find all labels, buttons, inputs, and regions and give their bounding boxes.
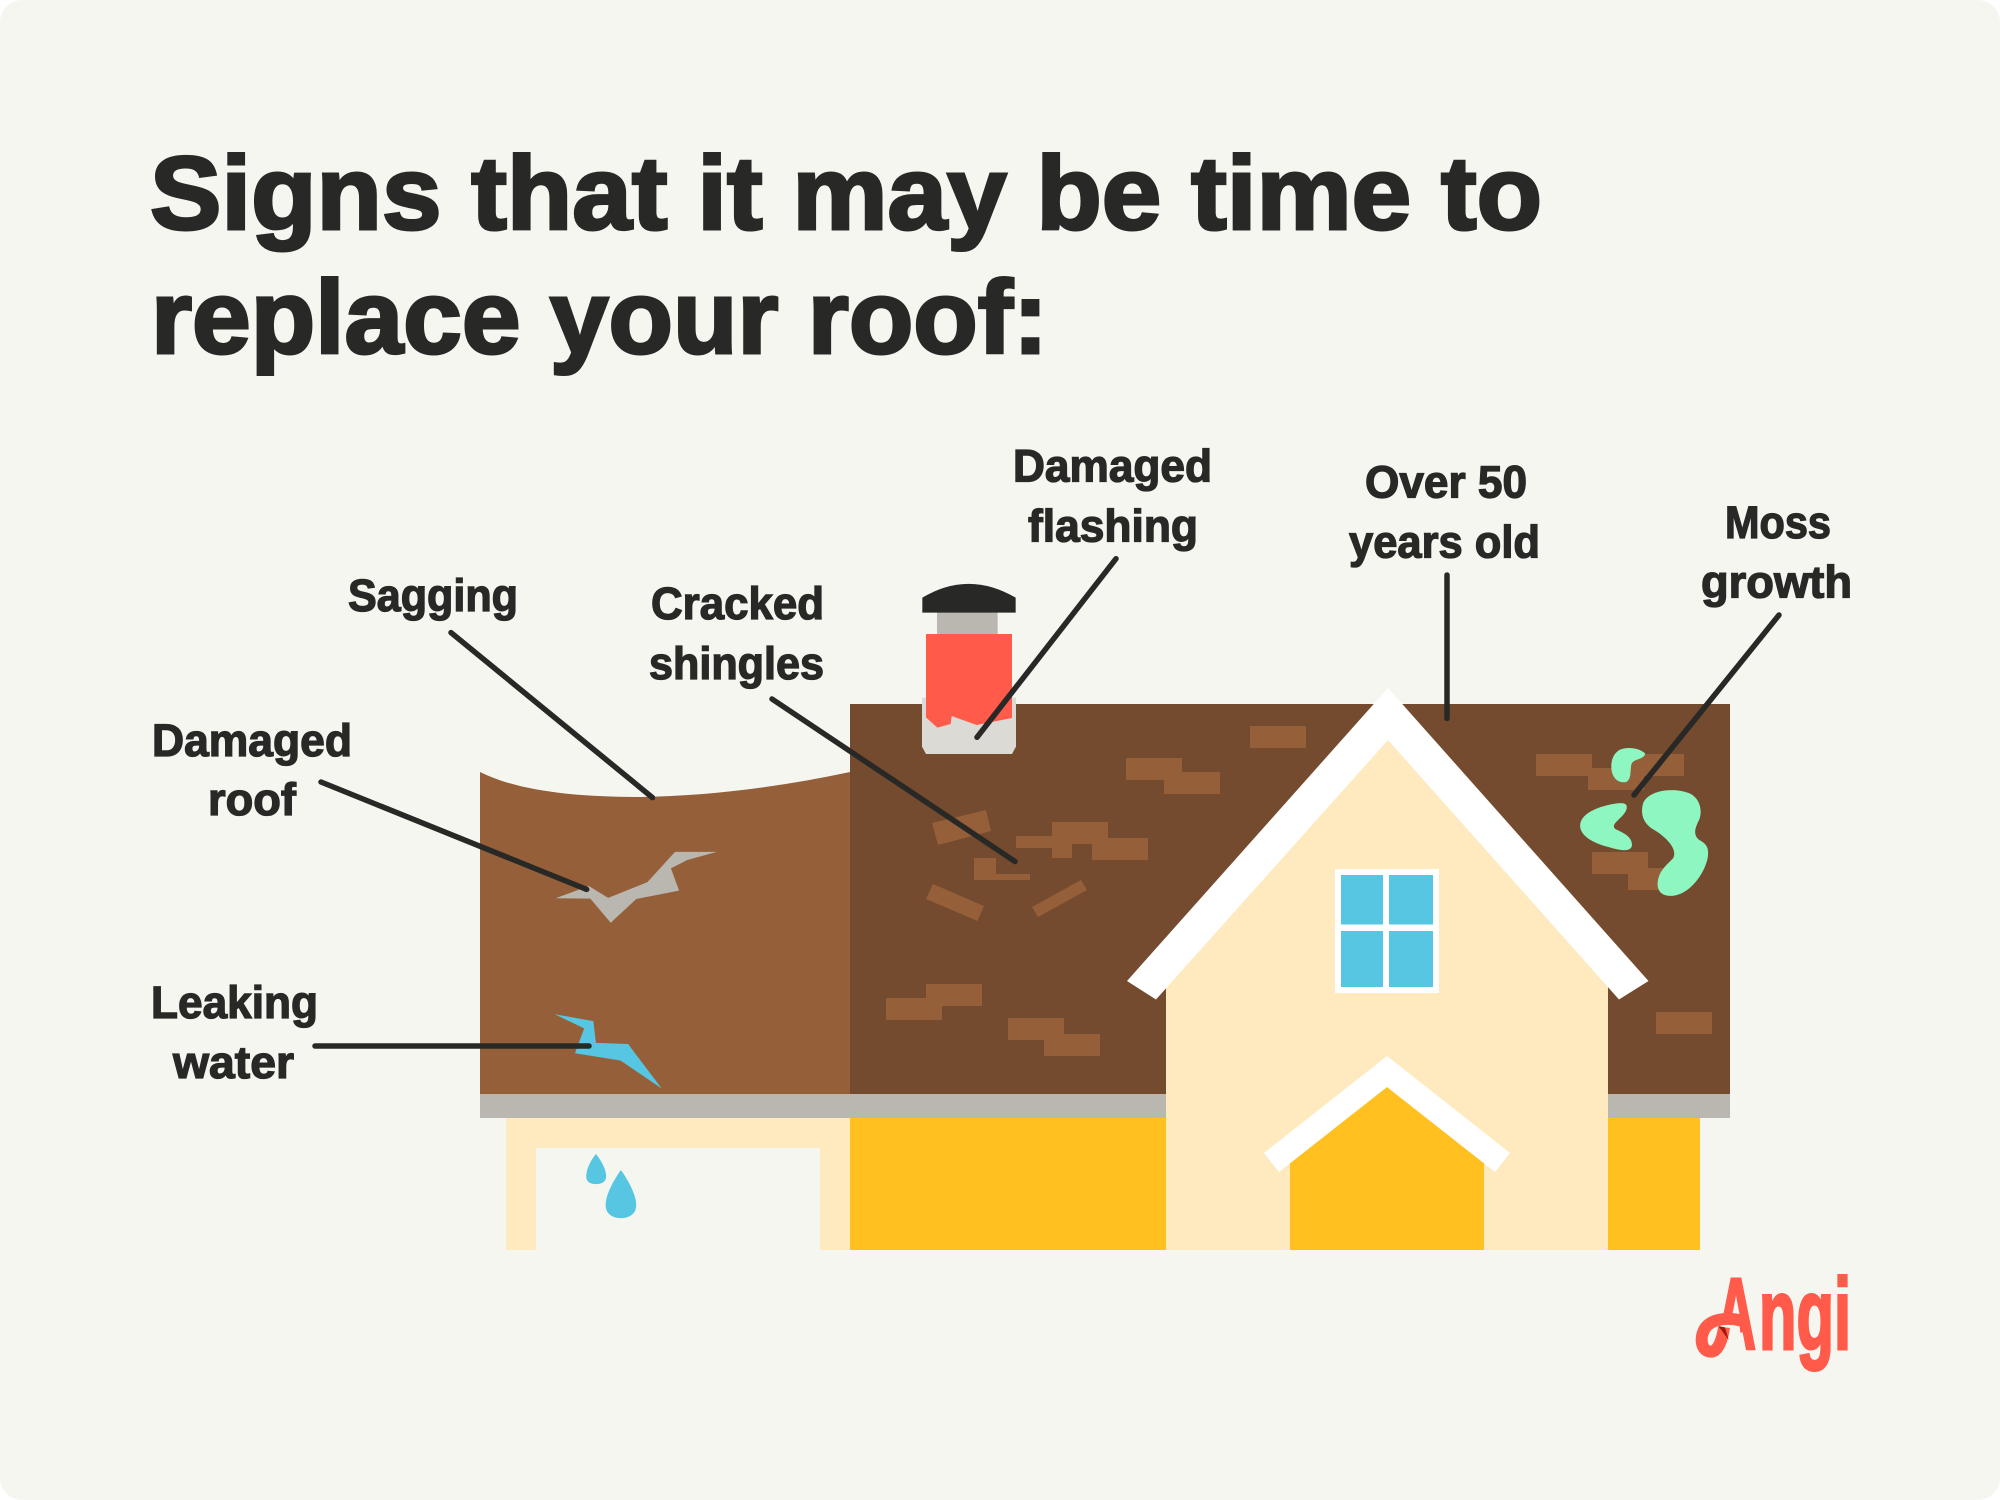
label: damaged roof <box>152 715 587 889</box>
shingles <box>886 726 1712 1056</box>
damaged flashing <box>926 634 1012 728</box>
label: cracked shingles: Cracked <box>651 578 824 629</box>
moss <box>1580 748 1708 896</box>
logo: Angi: ngi <box>1759 1259 1851 1371</box>
water drop large <box>606 1170 636 1218</box>
title: Signs that it may be time to <box>150 136 1542 252</box>
left garage wall <box>506 1118 850 1250</box>
label: leaking water: Leaking <box>151 977 318 1028</box>
label: damaged roof: Damaged <box>152 715 352 766</box>
sagging roof <box>480 772 850 1094</box>
label: over 50 years old <box>1349 456 1540 718</box>
house front <box>1166 734 1608 1250</box>
label: over 50 years old: years old <box>1349 516 1540 568</box>
main roof <box>850 704 1730 1094</box>
door gable trim <box>1264 1056 1510 1172</box>
logo: Angi <box>1702 1259 1851 1371</box>
label: over 50 years old: Over 50 <box>1365 456 1527 508</box>
gutter <box>480 1094 1730 1118</box>
label: damaged flashing: Damaged <box>1013 440 1212 492</box>
label: moss growth <box>1634 497 1852 795</box>
title: replace your roof: <box>151 260 1048 376</box>
chimney <box>922 584 1016 754</box>
logo: Angi: A <box>1716 1259 1756 1371</box>
label: sagging: Sagging <box>348 570 518 621</box>
door <box>1290 1087 1484 1250</box>
house illustration <box>480 584 1730 1250</box>
label: moss growth: Moss <box>1725 497 1831 548</box>
label: moss growth: growth <box>1701 556 1852 608</box>
label: damaged roof: roof <box>208 774 297 825</box>
label: damaged flashing <box>977 440 1212 737</box>
label: sagging <box>348 570 652 798</box>
window <box>1335 869 1439 993</box>
yellow wall <box>850 1118 1700 1250</box>
roof crack <box>556 852 717 923</box>
title <box>150 136 1542 376</box>
label: leaking water: water <box>172 1037 294 1088</box>
water drop small <box>586 1154 606 1184</box>
label: leaking water <box>151 977 589 1088</box>
water crack <box>555 1014 662 1088</box>
garage opening <box>536 1148 820 1250</box>
label: cracked shingles <box>649 578 1015 862</box>
label: cracked shingles: shingles <box>649 638 824 689</box>
label: damaged flashing: flashing <box>1028 500 1198 552</box>
roof damage and leak <box>555 852 717 1218</box>
roof gable trim <box>1127 688 1648 1000</box>
